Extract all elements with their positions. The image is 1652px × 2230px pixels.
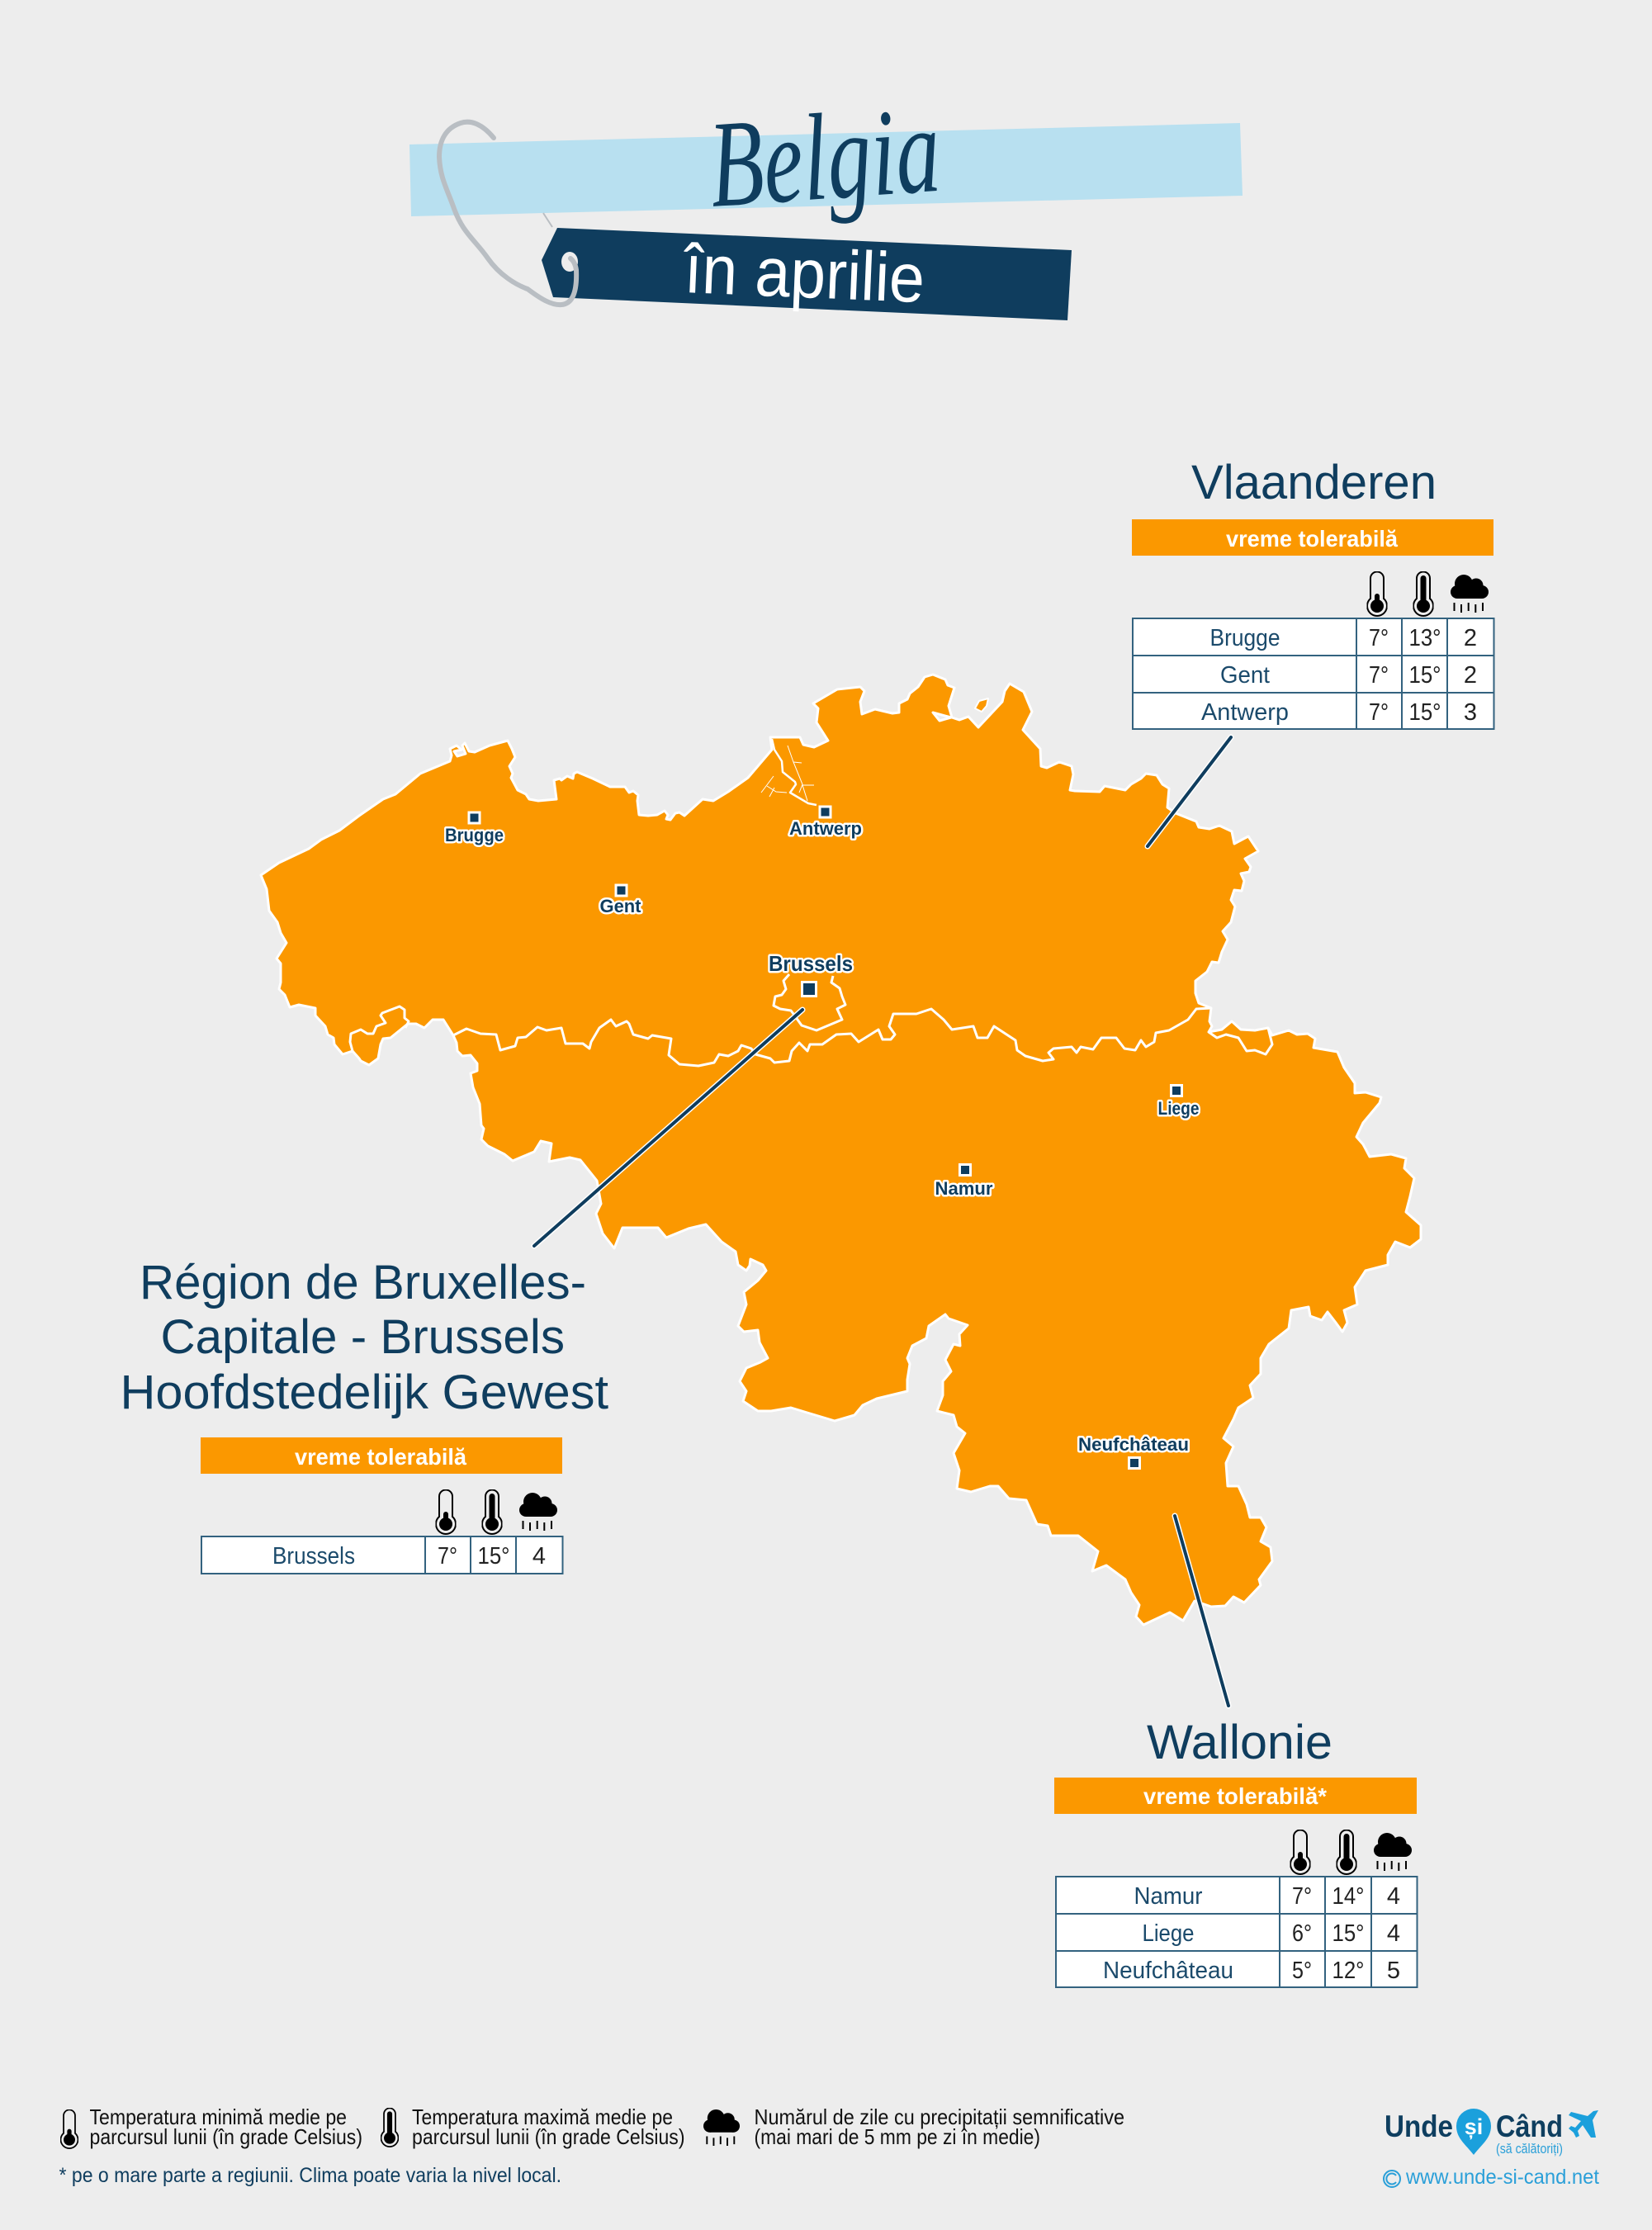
footnote: * pe o mare parte a regiunii. Clima poate varia la nivel local. — [59, 2164, 561, 2187]
climate table: 15° — [477, 1543, 510, 1570]
city: Brussels — [769, 951, 853, 996]
light blue title band — [409, 123, 1243, 216]
heading: region name: Capitale - Brussels — [160, 1310, 565, 1364]
legend text: maximum temperature — [412, 2105, 685, 2149]
climate table: Antwerp — [1201, 699, 1289, 726]
icon: rain cloud — [519, 1493, 557, 1531]
climate table: 15° — [1332, 1920, 1364, 1947]
climate table: 5° — [1292, 1958, 1312, 1984]
callout line: Brussels — [534, 1010, 802, 1246]
tag string — [543, 213, 552, 227]
legend text: precipitation days — [755, 2105, 1124, 2149]
tag hole — [561, 252, 578, 272]
icon: maximum temperature — [482, 1489, 502, 1534]
city: Namur: Namur — [935, 1178, 993, 1199]
silver tag ring — [439, 122, 576, 305]
callout line: Vlaanderen — [1148, 737, 1231, 846]
legend icon: rain cloud — [703, 2109, 740, 2146]
weather rating bar — [201, 1437, 562, 1474]
legend — [59, 2105, 1124, 2187]
panel: Wallonie — [1054, 1716, 1417, 1987]
climate table: 4 — [1387, 1883, 1400, 1910]
city: Brugge — [445, 812, 504, 845]
panel: Vlaanderen — [1132, 456, 1494, 729]
legend text: maximum temperature: Temperatura maximă medie pe — [412, 2105, 673, 2129]
climate table: 3 — [1464, 699, 1477, 726]
boundary: Mouscron enclave — [350, 1006, 409, 1051]
climate table: 5 — [1387, 1958, 1400, 1984]
city: Neufchâteau — [1078, 1434, 1189, 1468]
logo word: Unde: Unde — [1385, 2109, 1453, 2143]
climate table: 4 — [533, 1543, 546, 1570]
logo tagline: (să călătoriți) — [1496, 2141, 1563, 2157]
city: Namur — [935, 1164, 993, 1199]
climate table: Namur — [1134, 1883, 1203, 1910]
city: Antwerp — [789, 807, 862, 839]
icon: airplane — [1569, 2110, 1598, 2138]
subtitle: în aprilie: în aprilie — [681, 230, 926, 317]
navy luggage tag — [542, 228, 1072, 320]
city: Liege: Liege — [1157, 1098, 1199, 1119]
city: Brugge: Brugge — [445, 825, 504, 845]
climate table: 7° — [1292, 1883, 1312, 1910]
climate table: 14° — [1332, 1883, 1364, 1910]
logo word: și: și — [1465, 2114, 1483, 2139]
boundary: Voeren enclave — [1209, 1028, 1272, 1054]
climate table: Liege — [1143, 1920, 1194, 1947]
city: Liege — [1157, 1085, 1199, 1119]
logo word: Când: Când — [1496, 2109, 1563, 2143]
climate table: Brussels — [272, 1543, 355, 1570]
title block — [409, 81, 1243, 320]
weather rating text: vreme tolerabilă — [295, 1444, 466, 1470]
heading: region name: Région de Bruxelles- — [140, 1256, 586, 1309]
city: Brussels: Brussels — [769, 951, 853, 976]
logo pin — [1456, 2109, 1491, 2155]
website address: www.unde-si-cand.net — [1405, 2166, 1599, 2189]
climate table — [201, 1536, 563, 1574]
city: Gent — [599, 885, 641, 916]
legend text: minimum temperature: parcursul lunii (în grade Celsius) — [89, 2124, 362, 2149]
boundary: Vlaanderen and Wallonie — [453, 1008, 1211, 1066]
title: Belgia: Belgia — [705, 81, 944, 234]
icon: maximum temperature — [1413, 571, 1433, 616]
legend text: maximum temperature: parcursul lunii (în grade Celsius) — [412, 2124, 685, 2149]
climate table: 13° — [1408, 625, 1441, 651]
icon: copyright — [1384, 2171, 1400, 2187]
climate table: 6° — [1292, 1920, 1312, 1947]
city: Neufchâteau: Neufchâteau — [1078, 1434, 1189, 1455]
icon: minimum temperature — [1290, 1830, 1310, 1874]
legend text: minimum temperature: Temperatura minimă medie pe — [89, 2105, 347, 2129]
climate table: Gent — [1220, 662, 1270, 689]
Scheldt river near Antwerp — [772, 739, 817, 805]
map of Belgia — [261, 675, 1421, 1706]
callout line: Wallonie — [1175, 1516, 1228, 1706]
enclave hole near Baarle — [933, 713, 951, 721]
climate table: 7° — [1369, 662, 1389, 689]
climate table: 2 — [1464, 662, 1477, 689]
legend text: precipitation days: Numărul de zile cu precipitații semnificative — [755, 2105, 1124, 2129]
Antwerp harbour channels — [761, 746, 814, 801]
weather rating bar — [1054, 1778, 1417, 1814]
city: Gent: Gent — [599, 896, 641, 916]
legend icon: minimum temperature — [61, 2109, 78, 2148]
legend icon: maximum temperature — [381, 2108, 398, 2147]
climate table — [1133, 618, 1494, 729]
legend text: minimum temperature — [89, 2105, 362, 2149]
climate table: Brugge — [1210, 625, 1280, 651]
heading: Wallonie: Wallonie — [1147, 1716, 1332, 1769]
panel: Région de Bruxelles-Capitale — [121, 1256, 608, 1574]
icon: minimum temperature — [436, 1489, 456, 1534]
icon: rain cloud — [1374, 1833, 1412, 1871]
climate table: 7° — [438, 1543, 457, 1570]
city: Antwerp: Antwerp — [789, 818, 862, 839]
logo: Unde și Când — [1384, 2109, 1599, 2189]
weather rating text: vreme tolerabilă — [1226, 526, 1398, 552]
weather rating bar — [1132, 519, 1493, 556]
boundary: Brussels region — [774, 974, 845, 1030]
heading: region name: Hoofdstedelijk Gewest — [121, 1366, 608, 1419]
climate table: 12° — [1332, 1958, 1364, 1984]
icon: rain cloud — [1451, 575, 1489, 613]
icon: minimum temperature — [1367, 571, 1387, 616]
country outline — [261, 675, 1421, 1625]
legend text: precipitation days: (mai mari de 5 mm pe zi în medie) — [755, 2124, 1040, 2149]
climate table — [1056, 1877, 1417, 1987]
heading: Vlaanderen: Vlaanderen — [1191, 456, 1437, 509]
icon: maximum temperature — [1337, 1830, 1356, 1874]
climate table: 4 — [1387, 1920, 1400, 1947]
climate table: 15° — [1408, 699, 1441, 726]
climate table: 7° — [1369, 625, 1389, 651]
climate table: 15° — [1408, 662, 1441, 689]
Baarle island — [975, 698, 988, 712]
climate table: Neufchâteau — [1103, 1958, 1233, 1984]
climate table: 7° — [1369, 699, 1389, 726]
climate table: 2 — [1464, 625, 1477, 651]
weather rating text: vreme tolerabilă* — [1143, 1783, 1327, 1809]
heading: region name — [121, 1256, 608, 1419]
